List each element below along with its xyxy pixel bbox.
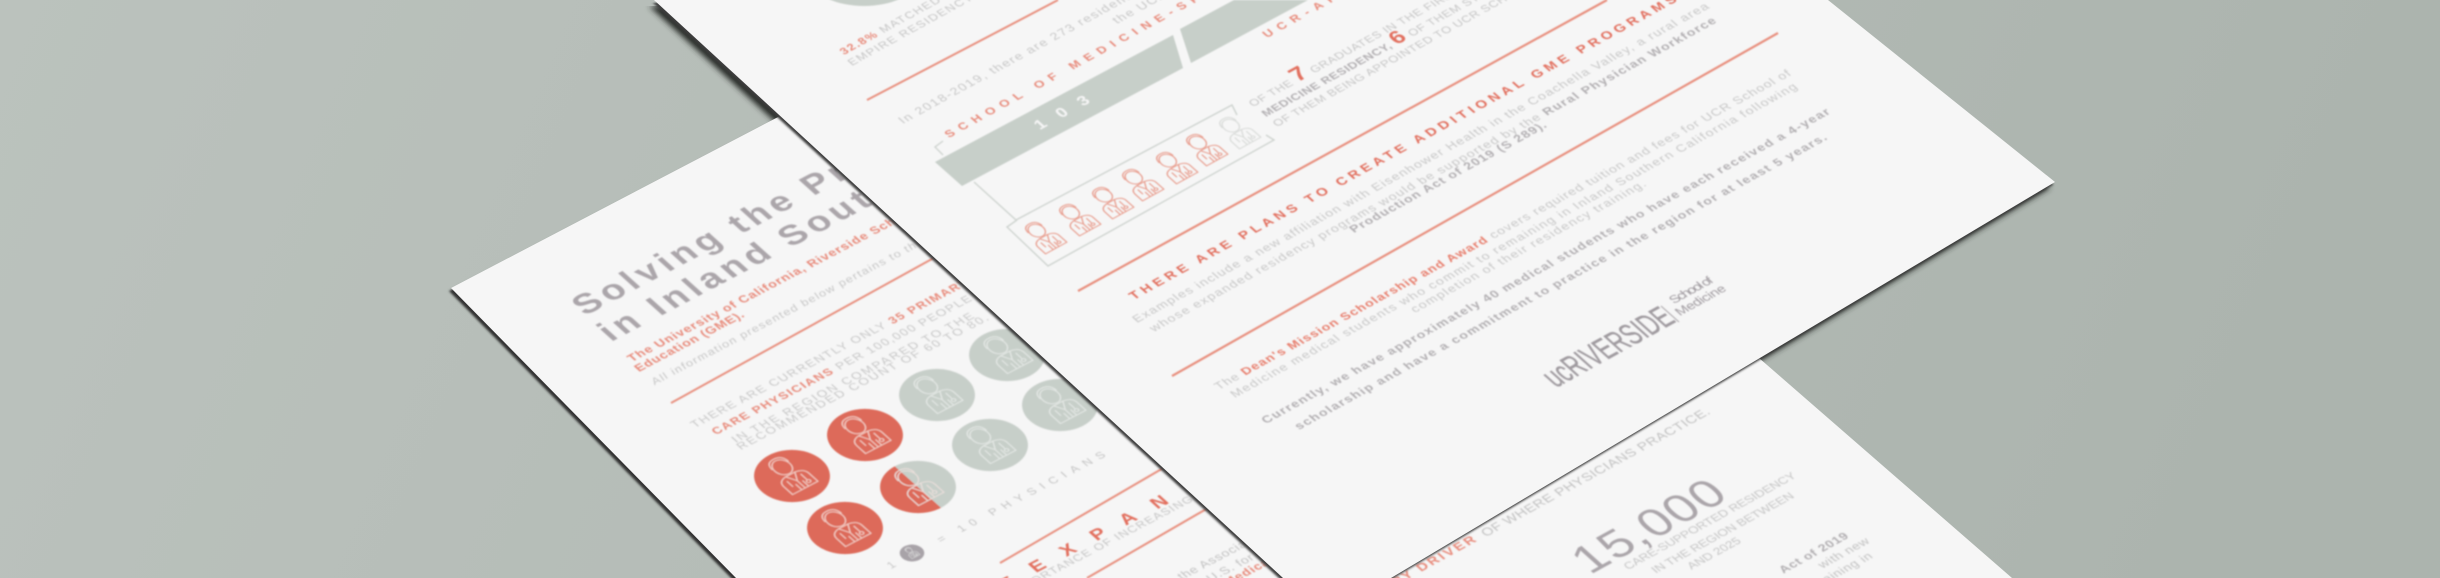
grey physician circle 2 bbox=[954, 318, 1060, 392]
caption: CARE-SUPPORTED RESIDENCY bbox=[1620, 470, 1799, 572]
sheet paper bbox=[654, 0, 2055, 578]
legend bbox=[885, 450, 1109, 571]
pictogram: physician circles bbox=[739, 318, 1113, 565]
grey physician circle 3 bbox=[937, 408, 1043, 482]
logo: UC Riverside School of Medicine: Medicine bbox=[1671, 282, 1729, 318]
divider bbox=[1172, 33, 1778, 376]
paragraph: scholarship award: Medicine medical students who commit to remaining in Inland Southern California following bbox=[1227, 81, 1800, 400]
subtitle: The University of California, Riverside School of Medicine bbox=[624, 166, 994, 364]
divider bbox=[867, 0, 1058, 100]
divider bbox=[671, 249, 950, 403]
graduate 4 bbox=[1116, 165, 1164, 201]
graduate 1 bbox=[1019, 218, 1067, 254]
paragraph: scholarship award: completion of their residency training. bbox=[1407, 178, 1649, 315]
pictogram: seven graduates bbox=[1019, 113, 1261, 254]
divider bbox=[1087, 508, 1208, 578]
logo: UC Riverside School of Medicine: ucRIVERSIDE bbox=[1533, 300, 1683, 393]
graduate 2 bbox=[1053, 200, 1101, 236]
divider bbox=[1078, 0, 1607, 291]
shadow of main sheet on surface bbox=[649, 6, 2050, 578]
value: 103 bbox=[1030, 86, 1107, 133]
paragraph: scholarship award: The Dean's Mission Scholarship and Award covers required tuition and fees for UCR School of bbox=[1211, 67, 1795, 392]
red physician circle 3 bbox=[792, 491, 898, 565]
paragraph: physician count: THERE ARE CURRENTLY ONLY 35 PRIMARY bbox=[687, 277, 971, 430]
paragraph: new affiliation: whose expanded residency programs would be supported by the Rural Physician Workforce bbox=[1145, 15, 1719, 334]
grey text: where physicians practice: OF WHERE PHYSICIANS PRACTICE. bbox=[1477, 405, 1713, 539]
paragraph: current students: scholarship and have a commitment to practice in the region for at least 5 years. bbox=[1291, 132, 1830, 432]
grey physician circle 4 bbox=[1007, 368, 1113, 442]
shadow of lower sheet on surface bbox=[449, 103, 2010, 578]
subtitle: Education (GME). bbox=[631, 309, 747, 374]
logo: UC Riverside School of Medicine: School of bbox=[1665, 274, 1717, 306]
panel: main sheet bbox=[654, 0, 2055, 578]
sheet content bbox=[814, 0, 1833, 432]
half red half grey physician circle bbox=[865, 450, 971, 524]
graduate 5 bbox=[1150, 148, 1198, 184]
edge shadow of main sheet on lower sheet bbox=[652, 2, 2054, 578]
divider bbox=[1000, 467, 1165, 563]
title: in Inland Southern California bbox=[590, 33, 1168, 347]
paragraph: physician count: IN THE REGION COMPARED TO THE bbox=[728, 310, 977, 445]
logo: UC Riverside School of Medicine bbox=[1533, 274, 1729, 393]
red physician circle 1 bbox=[739, 439, 845, 513]
bracket callout bbox=[935, 105, 1274, 266]
panel: lower sheet bbox=[451, 0, 2012, 578]
sheet content bbox=[564, 0, 1876, 578]
donut chart fragment bbox=[814, 0, 914, 6]
red physician circle 2 bbox=[812, 398, 918, 472]
heading: GME programs: THERE ARE PLANS TO CREATE ADDITIONAL GME PROGRAMS bbox=[1125, 0, 1680, 302]
paragraph: physician count: CARE PHYSICIANS PER 100,000 PEOPLE bbox=[708, 293, 975, 437]
sheet paper bbox=[451, 100, 2012, 578]
paragraph: new affiliation: Production Act of 2019 (S 289). bbox=[1346, 119, 1550, 235]
paragraph: current students: Currently, we have approximately 40 medical students who have each received a 4-year bbox=[1258, 106, 1833, 426]
caption: AND 2025 bbox=[1684, 535, 1744, 572]
disclaimer: All information presented below pertains to the region bbox=[648, 217, 967, 387]
grey physician circle 1 bbox=[884, 358, 990, 432]
legend: 1 bbox=[885, 560, 899, 571]
bar: UCR affiliated bbox=[1180, 0, 1438, 63]
legend: = 10 PHYSICIANS bbox=[935, 450, 1109, 545]
paragraph: physician count: RECOMMENDED COUNT OF 60 TO 80. bbox=[733, 312, 992, 452]
section heading: expansion: EXPANSION bbox=[1025, 421, 1310, 576]
graduate 3 bbox=[1086, 183, 1134, 219]
paragraph fragment: Act of 2019 bbox=[1776, 530, 1852, 575]
paragraph fragment: with new bbox=[1814, 535, 1874, 571]
graduate 7 bbox=[1213, 113, 1261, 149]
bar: school of medicine sponsored bbox=[935, 0, 1303, 186]
graduate 6 bbox=[1180, 130, 1228, 166]
caption: IN THE REGION BETWEEN bbox=[1648, 490, 1797, 575]
paragraph: new affiliation: Examples include a new affiliation with Eisenhower Health in the Coachella Valley, a rural area bbox=[1129, 1, 1712, 325]
